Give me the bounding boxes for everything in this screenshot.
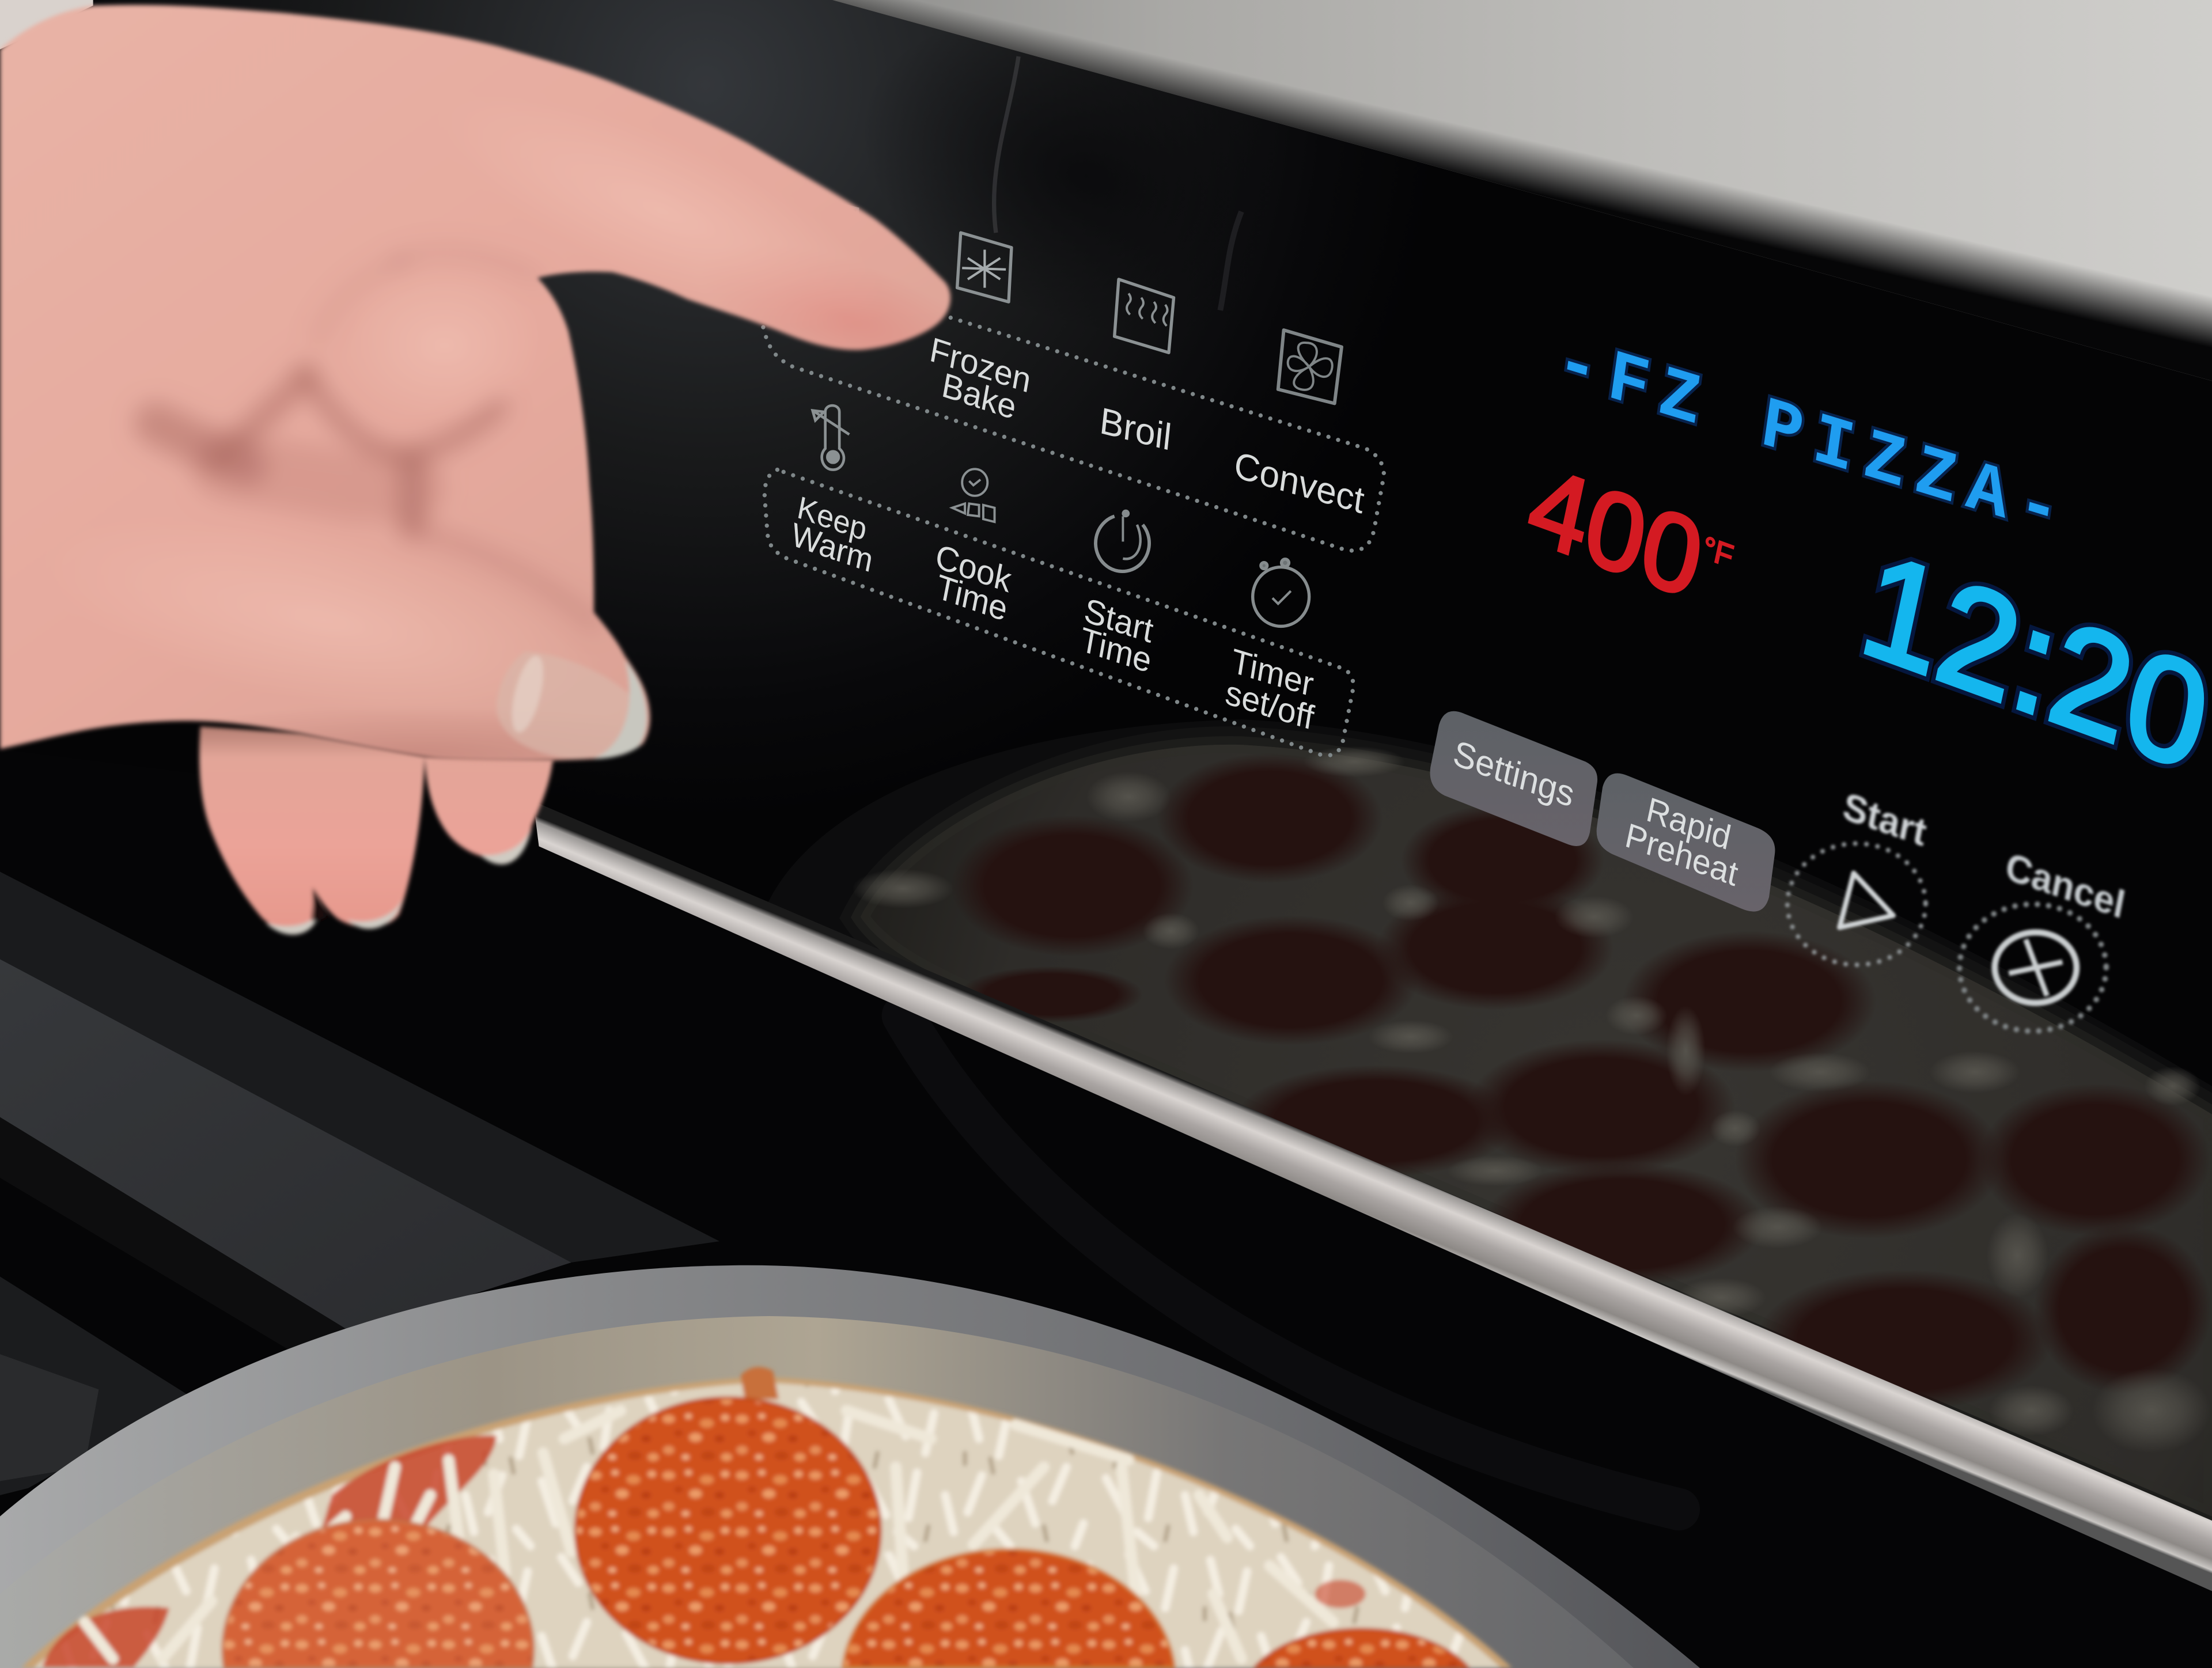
stainless steel top of range (832, 0, 2212, 381)
pizza (21, 1367, 1512, 1668)
thumb nail (498, 655, 629, 760)
little finger (425, 756, 553, 858)
mode button labels: set/off (1223, 673, 1317, 737)
knuckle highlight (406, 316, 487, 378)
ring finger (199, 726, 313, 930)
mode button labels: Frozen (927, 330, 1034, 400)
icon: hidden bake icon behind finger (818, 199, 858, 233)
icon: keep warm thermometer (813, 405, 849, 470)
button: cancel (1960, 844, 2128, 1031)
oven door below handle (0, 749, 2212, 1668)
button: settings: Settings (1450, 733, 1578, 815)
icon: cook time clock and bars (952, 469, 995, 522)
pepperoni slices (223, 1398, 1468, 1667)
mode button labels: Time (933, 567, 1010, 629)
pizza pan (0, 1265, 1700, 1668)
mode button labels: Bake (939, 366, 1019, 427)
button: settings (1430, 711, 1597, 846)
icon: timer alarm clock (1253, 559, 1309, 626)
hand: lower fingers (199, 726, 553, 935)
mode button labels: Convect (1232, 443, 1367, 522)
display: program text: -FZ PIZZA- (1551, 321, 2075, 558)
pale background corner above hand (0, 0, 93, 50)
display: clock: 12:20 (1849, 521, 2212, 802)
index fingertip redness (766, 279, 923, 349)
cheese strands (85, 1411, 1333, 1659)
tomato sauce patches (42, 1367, 1366, 1667)
button: cancel: Cancel (2002, 844, 2128, 927)
mode button labels: Start (1081, 590, 1156, 650)
icon: broil (1115, 279, 1174, 352)
button: start (1787, 784, 1930, 965)
mode button labels: Time (1077, 620, 1154, 680)
icon: frozen bake snowflake (957, 233, 1012, 302)
button: start: Start (1840, 784, 1930, 855)
mode button labels: Timer (1229, 642, 1316, 704)
mode button labels: Keep (794, 490, 870, 548)
display: program text: -FZ PIZZA- (1551, 321, 2075, 558)
mode buttons: lower dotted group (764, 470, 1353, 755)
button: rapid preheat: Rapid (1643, 790, 1734, 858)
button: rapid preheat: Preheat (1622, 816, 1741, 893)
stainless door handle (533, 801, 2212, 1591)
hand: palm, index finger and thumb (0, 5, 1012, 803)
button: rapid preheat (1597, 774, 1775, 912)
display: temperature: 400 (1519, 442, 1713, 621)
display: temperature: °F (1699, 530, 1736, 575)
mode button labels (789, 330, 1367, 737)
thumb lit area (202, 573, 476, 676)
gap between ring and middle finger (300, 761, 327, 923)
icon: start time power (1096, 511, 1149, 571)
lower range trim bands (0, 872, 719, 1495)
mode buttons: upper dotted group (763, 316, 1384, 551)
mode button labels: Warm (789, 515, 876, 579)
mode button labels: Broil (1098, 399, 1173, 458)
middle finger (290, 734, 425, 927)
display: clock: 12:20 (1849, 521, 2212, 802)
icon: convect fan (1278, 330, 1342, 403)
thumb lower shadow (287, 722, 558, 761)
soft creases between fingers (155, 252, 594, 623)
reflection of pizza in the glass (762, 719, 2212, 1526)
mode button labels: Cook (933, 537, 1014, 600)
